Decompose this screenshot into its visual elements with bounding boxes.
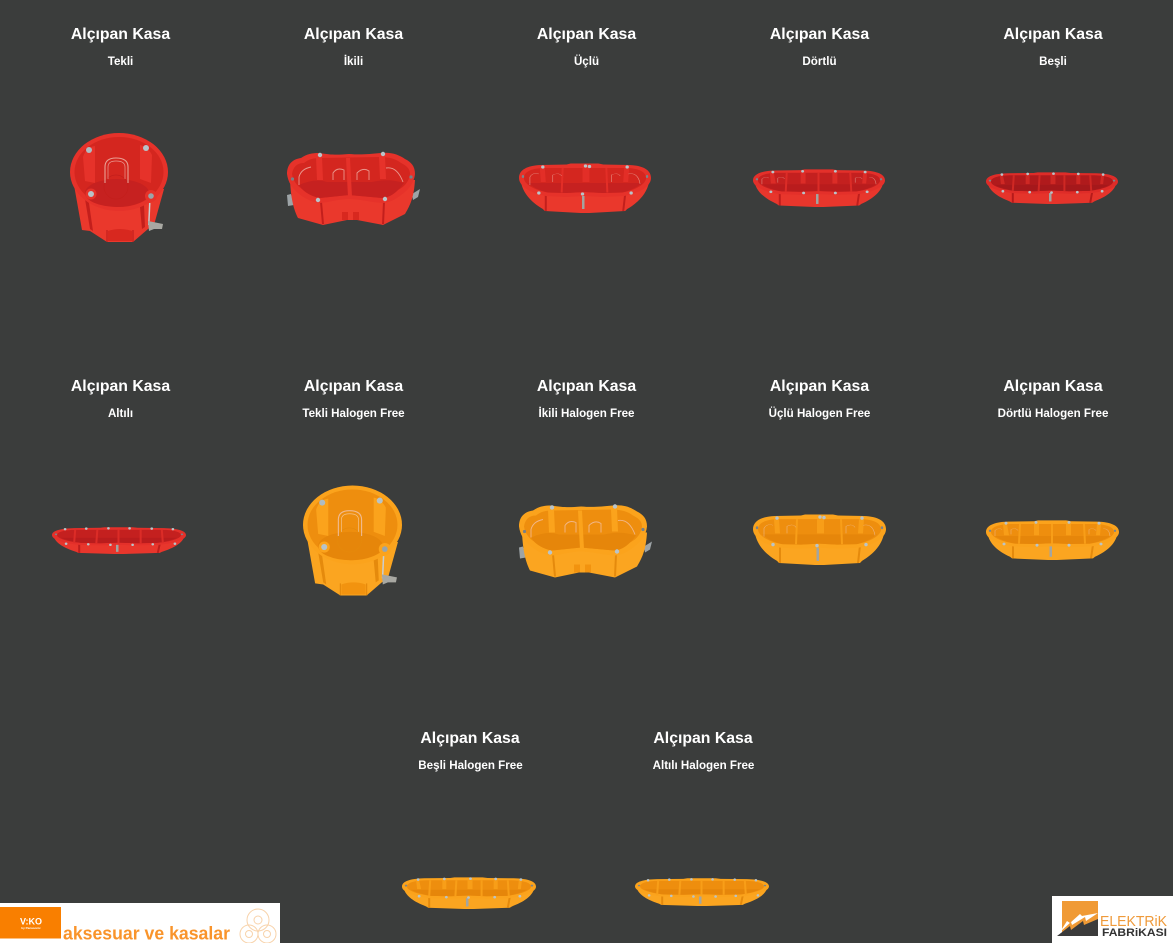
product card: Dörtlü Halogen Free: Dörtlü Halogen Free <box>998 407 1109 420</box>
product card: Dörtlü Halogen Free <box>986 378 1119 560</box>
product card: Üçlü: Üçlü <box>574 55 599 68</box>
product card: Üçlü <box>519 26 651 213</box>
logo banner: Viko aksesuar ve kasalar: V:KO <box>20 916 42 926</box>
product card: İkili: Alçıpan Kasa <box>304 26 403 43</box>
product card: Dörtlü Halogen Free: Alçıpan Kasa <box>1003 378 1103 395</box>
product card: İkili <box>287 26 420 225</box>
logo banner: Viko aksesuar ve kasalar <box>0 903 280 943</box>
product card: Beşli Halogen Free <box>402 730 536 909</box>
product card: İkili Halogen Free: Alçıpan Kasa <box>537 378 636 395</box>
product card: Tekli Halogen Free: Alçıpan Kasa <box>304 378 403 395</box>
product card: Altılı: Altılı <box>108 407 133 420</box>
product card: Tekli: Alçıpan Kasa <box>71 26 170 43</box>
product card: Tekli <box>70 26 170 242</box>
logo banner: Viko aksesuar ve kasalar: by Panasonic <box>21 926 41 930</box>
product card: Tekli Halogen Free <box>302 378 405 596</box>
product card: Dörtlü: Alçıpan Kasa <box>770 26 869 43</box>
product card: Tekli Halogen Free: Tekli Halogen Free <box>302 407 405 420</box>
logo: Elektrik Fabrikası: ELEKTRiK <box>1100 913 1167 930</box>
product card: İkili Halogen Free: İkili Halogen Free <box>538 407 635 420</box>
product card: Altılı <box>52 378 186 554</box>
product card: Altılı Halogen Free <box>635 730 769 906</box>
product card: Üçlü Halogen Free: Üçlü Halogen Free <box>769 407 871 420</box>
product card: Beşli Halogen Free: Beşli Halogen Free <box>418 759 523 772</box>
product card: Beşli: Beşli <box>1039 55 1067 68</box>
logo: Elektrik Fabrikası: FABRiKASI <box>1102 927 1167 939</box>
product card: Dörtlü <box>753 26 885 207</box>
logo: Elektrik Fabrikası <box>1052 896 1173 943</box>
product card: İkili Halogen Free <box>519 378 652 578</box>
product card: Tekli: Tekli <box>108 55 133 68</box>
product card: Beşli <box>986 26 1118 204</box>
product card: İkili: İkili <box>344 55 363 68</box>
product card: Üçlü: Alçıpan Kasa <box>537 26 636 43</box>
product card: Beşli Halogen Free: Alçıpan Kasa <box>420 730 520 747</box>
product card: Altılı Halogen Free: Alçıpan Kasa <box>653 730 753 747</box>
logo banner: Viko aksesuar ve kasalar: aksesuar ve kasalar <box>63 924 230 943</box>
product card: Beşli: Alçıpan Kasa <box>1003 26 1103 43</box>
product card: Üçlü Halogen Free: Alçıpan Kasa <box>770 378 869 395</box>
product card: Altılı: Alçıpan Kasa <box>71 378 170 395</box>
product card: Üçlü Halogen Free <box>753 378 886 565</box>
product card: Dörtlü: Dörtlü <box>802 55 837 68</box>
product card: Altılı Halogen Free: Altılı Halogen Free <box>653 759 755 772</box>
